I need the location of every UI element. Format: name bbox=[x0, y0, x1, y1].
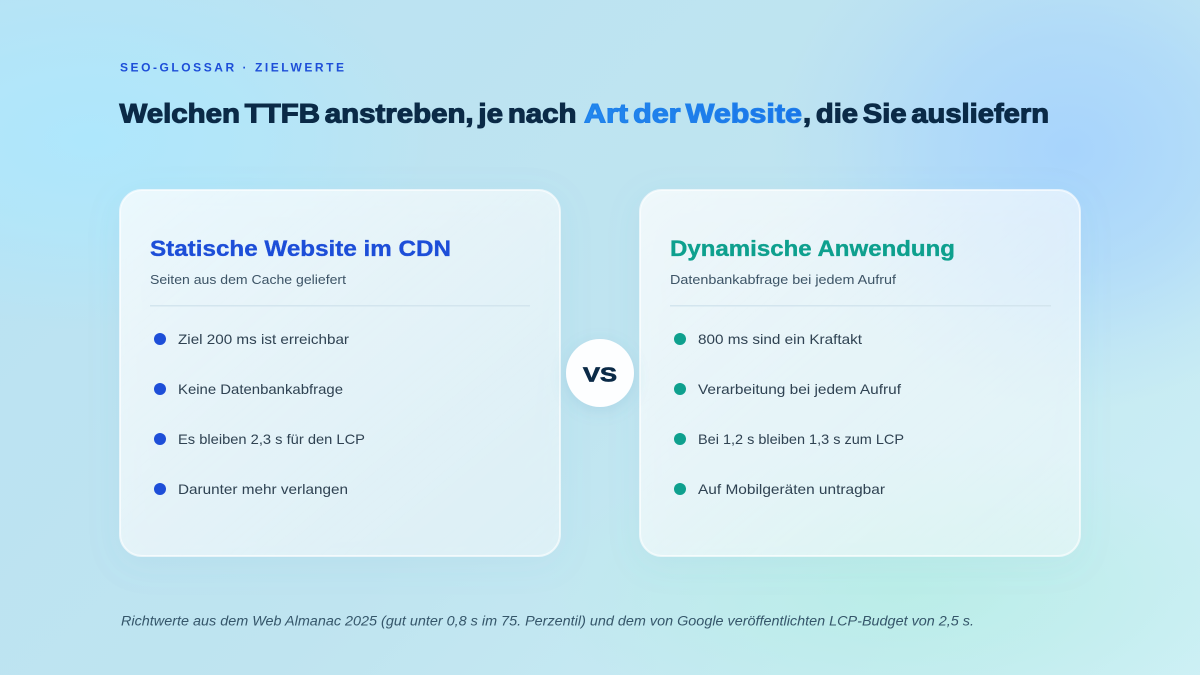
vs badge bbox=[566, 339, 634, 407]
divider left bbox=[150, 305, 530, 306]
panel: static website on CDN bbox=[120, 190, 560, 556]
bullet 2: Verarbeitung bei jedem Aufruf bbox=[698, 381, 901, 397]
list: dynamic application points bbox=[674, 331, 904, 497]
eyebrow label: SEO-GLOSSAR · ZIELWERTE bbox=[120, 60, 344, 74]
title: Art der Website bbox=[584, 98, 802, 128]
bullet 2: Keine Datenbankabfrage bbox=[178, 381, 343, 397]
vs badge: VS bbox=[583, 364, 617, 386]
card background right bbox=[640, 190, 1080, 556]
footnote: Richtwerte aus dem Web Almanac 2025 (gut unter 0,8 s im 75. Perzentil) und dem von Google veröffentlichten LCP-Budget von 2,5 s. bbox=[121, 614, 974, 628]
card subtitle left: Seiten aus dem Cache geliefert bbox=[150, 272, 346, 287]
bullet 1: 800 ms sind ein Kraftakt bbox=[698, 331, 862, 347]
card subtitle right: Datenbankabfrage bei jedem Aufruf bbox=[670, 272, 896, 287]
panel: dynamic application bbox=[640, 190, 1080, 556]
card heading left: Statische Website im CDN bbox=[150, 236, 451, 261]
bullet 3: Es bleiben 2,3 s für den LCP bbox=[178, 431, 365, 447]
card background left bbox=[120, 190, 560, 556]
bullet 1: Ziel 200 ms ist erreichbar bbox=[178, 331, 349, 347]
card heading right: Dynamische Anwendung bbox=[670, 236, 955, 261]
title: Welchen TTFB anstreben, je nach bbox=[120, 98, 576, 128]
divider right bbox=[670, 305, 1051, 306]
list: static website points bbox=[154, 331, 365, 497]
bullet 4: Darunter mehr verlangen bbox=[178, 481, 348, 497]
title: , die Sie ausliefern bbox=[803, 98, 1049, 128]
title bbox=[120, 98, 1049, 128]
bullet 4: Auf Mobilgeräten untragbar bbox=[698, 481, 885, 497]
bullet 3: Bei 1,2 s bleiben 1,3 s zum LCP bbox=[698, 431, 904, 447]
